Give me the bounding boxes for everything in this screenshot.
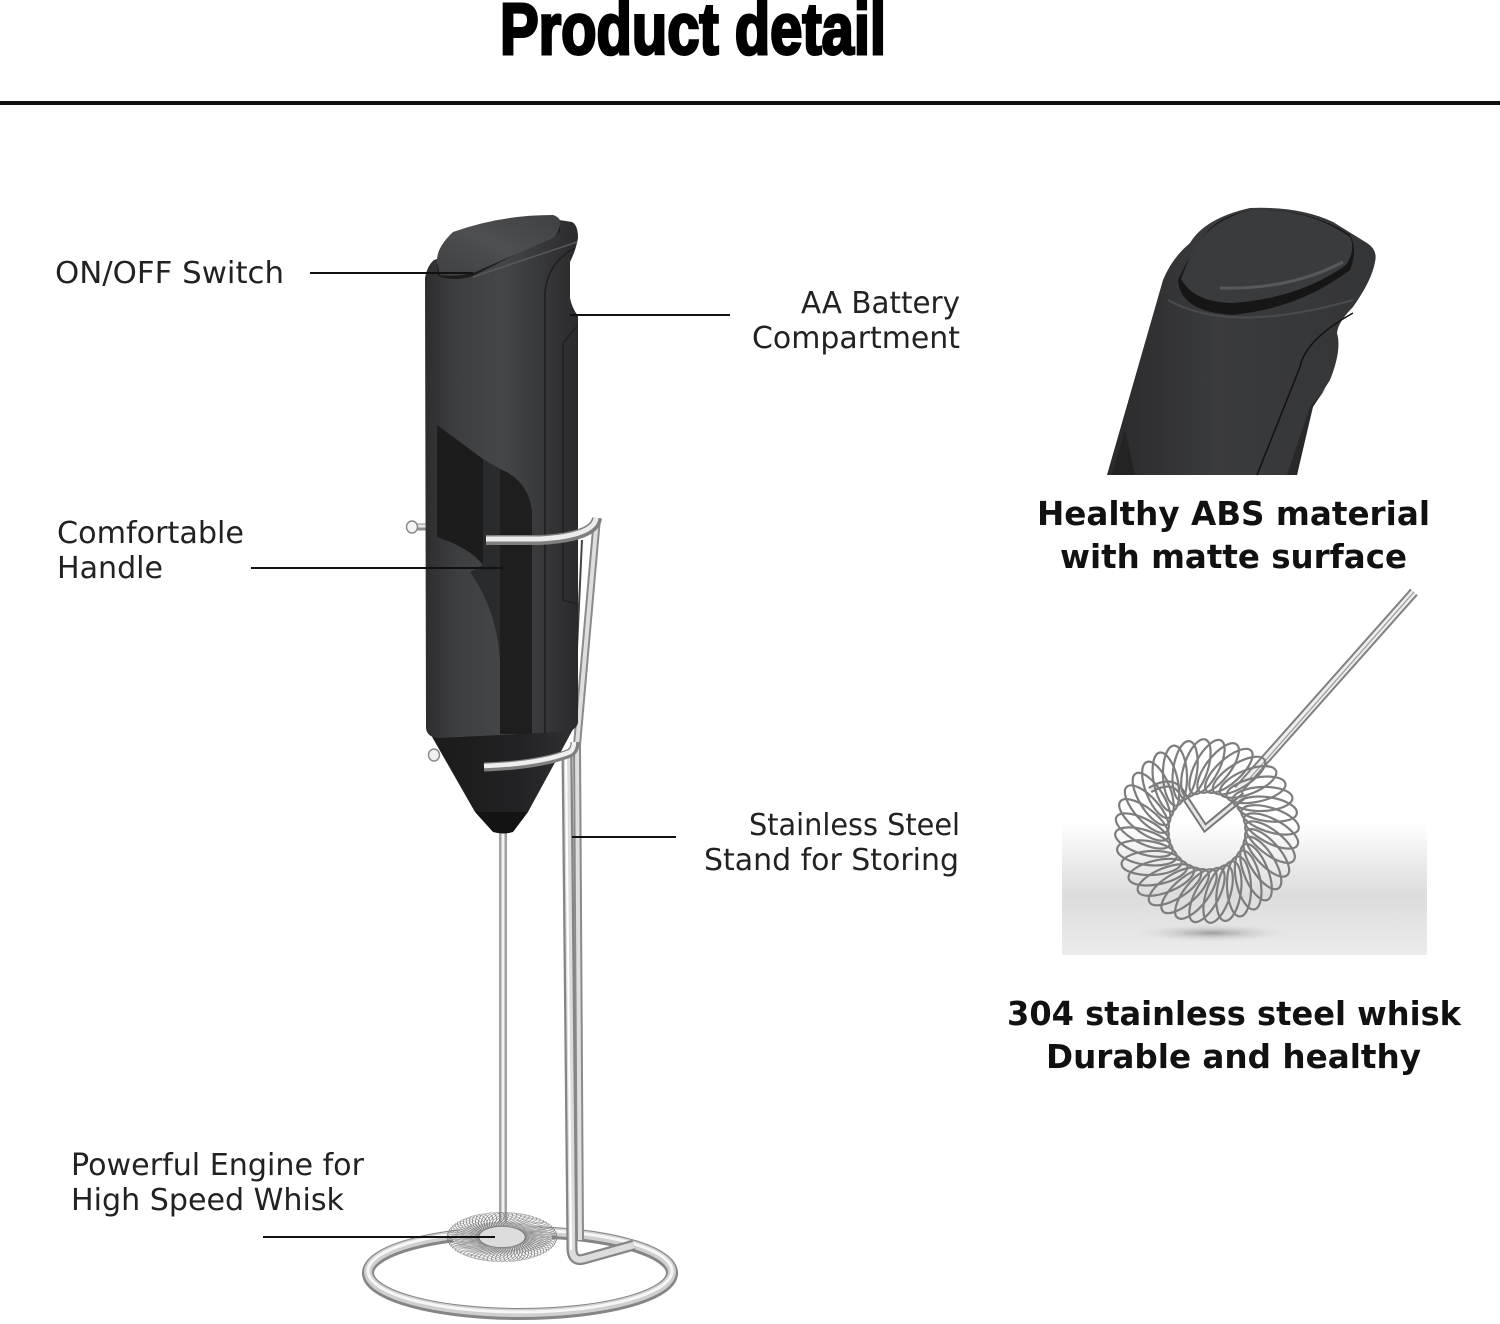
frother shaft xyxy=(499,832,507,1227)
whisk shaft xyxy=(1238,592,1414,790)
label: battery compartment: AA Battery xyxy=(801,286,960,321)
whisk backdrop xyxy=(1062,822,1427,955)
whisk core wire xyxy=(1150,784,1245,828)
label: comfortable handle: Handle xyxy=(57,551,163,586)
close-up caption: material xyxy=(1037,494,1430,576)
label: powerful engine: High Speed Whisk xyxy=(71,1183,345,1218)
close-up: whisk xyxy=(1062,592,1427,955)
close-up caption: whisk: Durable and healthy xyxy=(1046,1037,1421,1076)
dark grip panel left xyxy=(437,425,483,565)
frother body xyxy=(425,219,578,738)
stand: base ring xyxy=(368,1230,672,1314)
body seam and battery window xyxy=(473,242,577,733)
label: stainless steel stand: Stand for Storing xyxy=(704,843,959,878)
label: powerful engine xyxy=(71,1148,495,1237)
grip panel centre xyxy=(470,459,500,663)
stand: rear pins xyxy=(406,521,440,761)
label: powerful engine: Powerful Engine for xyxy=(71,1148,365,1183)
label: stainless steel stand xyxy=(572,808,960,878)
product: milk frother on stand xyxy=(368,215,672,1314)
close-up: handle top xyxy=(1107,208,1376,475)
label: battery compartment xyxy=(570,286,960,356)
label: on/off switch: ON/OFF Switch xyxy=(55,256,284,291)
stand: vertical wires xyxy=(566,518,634,1260)
label: comfortable handle xyxy=(57,516,503,586)
frother cone xyxy=(427,722,577,812)
whisk coil xyxy=(1111,735,1303,927)
close-up caption: whisk: 304 stainless steel whisk xyxy=(1007,994,1462,1033)
label: battery compartment: Compartment xyxy=(752,321,960,356)
whisk shadow xyxy=(1134,924,1290,942)
on/off switch cap xyxy=(437,215,560,279)
stand: front rings xyxy=(484,518,597,767)
close-up caption: material: Healthy ABS material xyxy=(1037,494,1430,533)
small whisk coil xyxy=(440,1209,564,1265)
dark grip strip xyxy=(500,469,532,734)
close-up caption: whisk xyxy=(1007,994,1462,1076)
close-up caption: material: with matte surface xyxy=(1060,537,1407,576)
frother nozzle tip xyxy=(475,812,528,834)
label: comfortable handle: Comfortable xyxy=(57,516,244,551)
label: stainless steel stand: Stainless Steel xyxy=(749,808,960,843)
